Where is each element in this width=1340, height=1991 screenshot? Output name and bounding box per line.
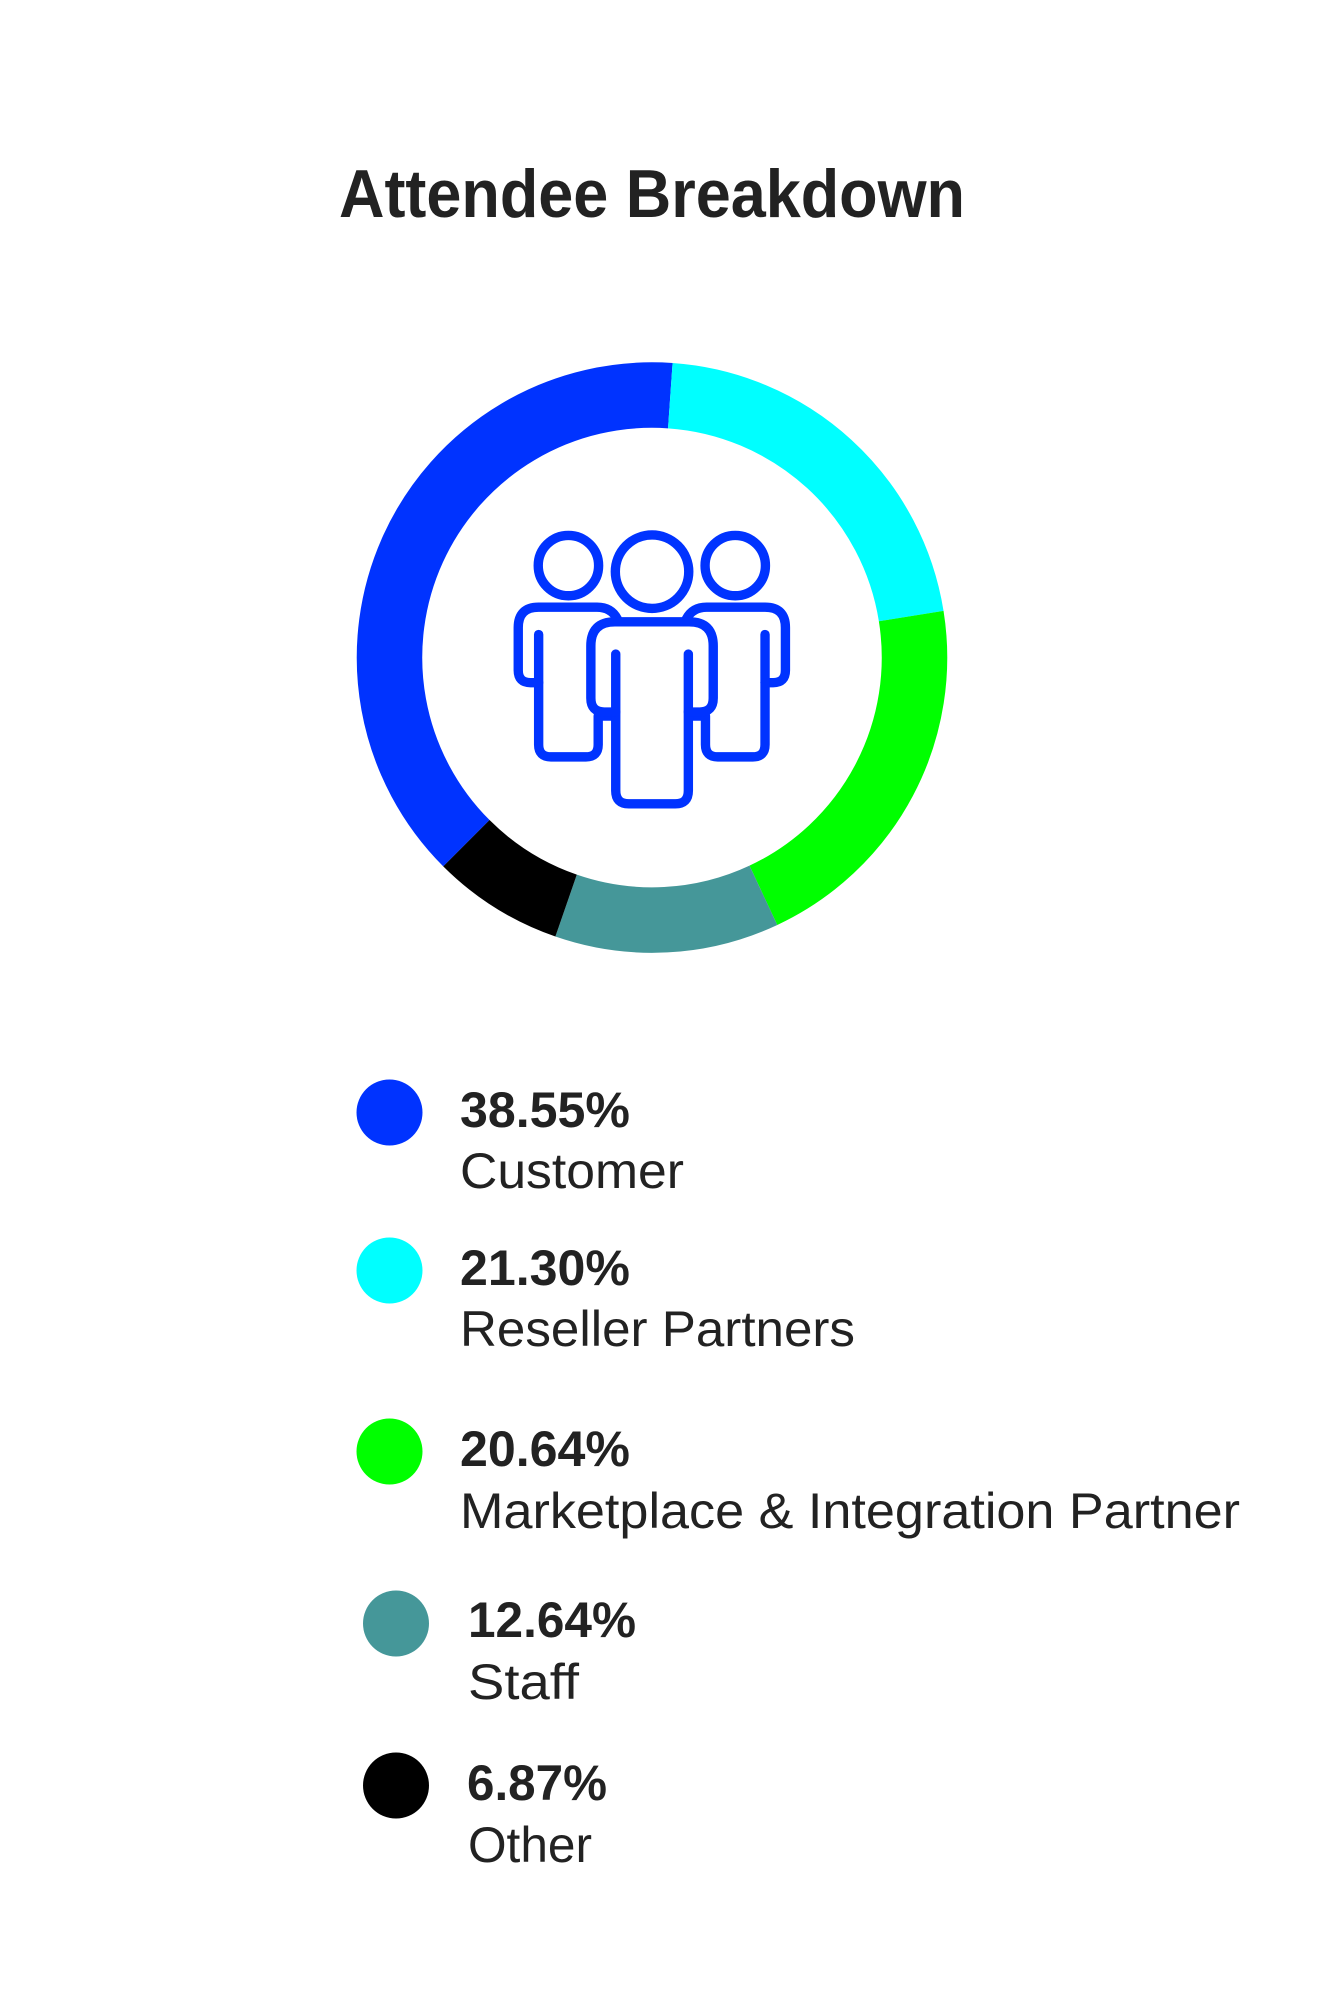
segment: customer <box>389 395 670 843</box>
legend item: customer: 38.55% <box>460 1082 630 1138</box>
legend item: reseller partners <box>356 1238 855 1357</box>
legend item: other: 6.87% <box>467 1755 607 1811</box>
legend item: marketplace and integration partner <box>356 1418 1240 1539</box>
legend item: marketplace and integration partner: Marketplace & Integration Partner <box>460 1483 1240 1539</box>
legend item: customer <box>356 1080 684 1199</box>
legend item: reseller partners: Reseller Partners <box>460 1301 855 1357</box>
legend item: other <box>363 1752 607 1873</box>
legend item: marketplace and integration partner: 20.64% <box>460 1421 630 1477</box>
legend item: staff <box>363 1590 636 1710</box>
legend item: staff: Staff <box>468 1654 579 1710</box>
legend item: staff: 12.64% <box>468 1592 636 1648</box>
legend item: customer: Customer <box>460 1143 684 1199</box>
legend <box>356 1080 1240 1873</box>
segment: reseller partners <box>670 396 911 616</box>
title: Attendee Breakdown <box>339 156 965 232</box>
legend item: reseller partners: 21.30% <box>460 1240 630 1296</box>
legend item: other: Other <box>468 1817 592 1873</box>
donut chart <box>389 395 915 920</box>
icon: group of people <box>518 535 785 804</box>
segment: marketplace and integration partner <box>763 616 915 895</box>
segment: staff <box>566 895 763 920</box>
segment: other <box>466 843 566 906</box>
